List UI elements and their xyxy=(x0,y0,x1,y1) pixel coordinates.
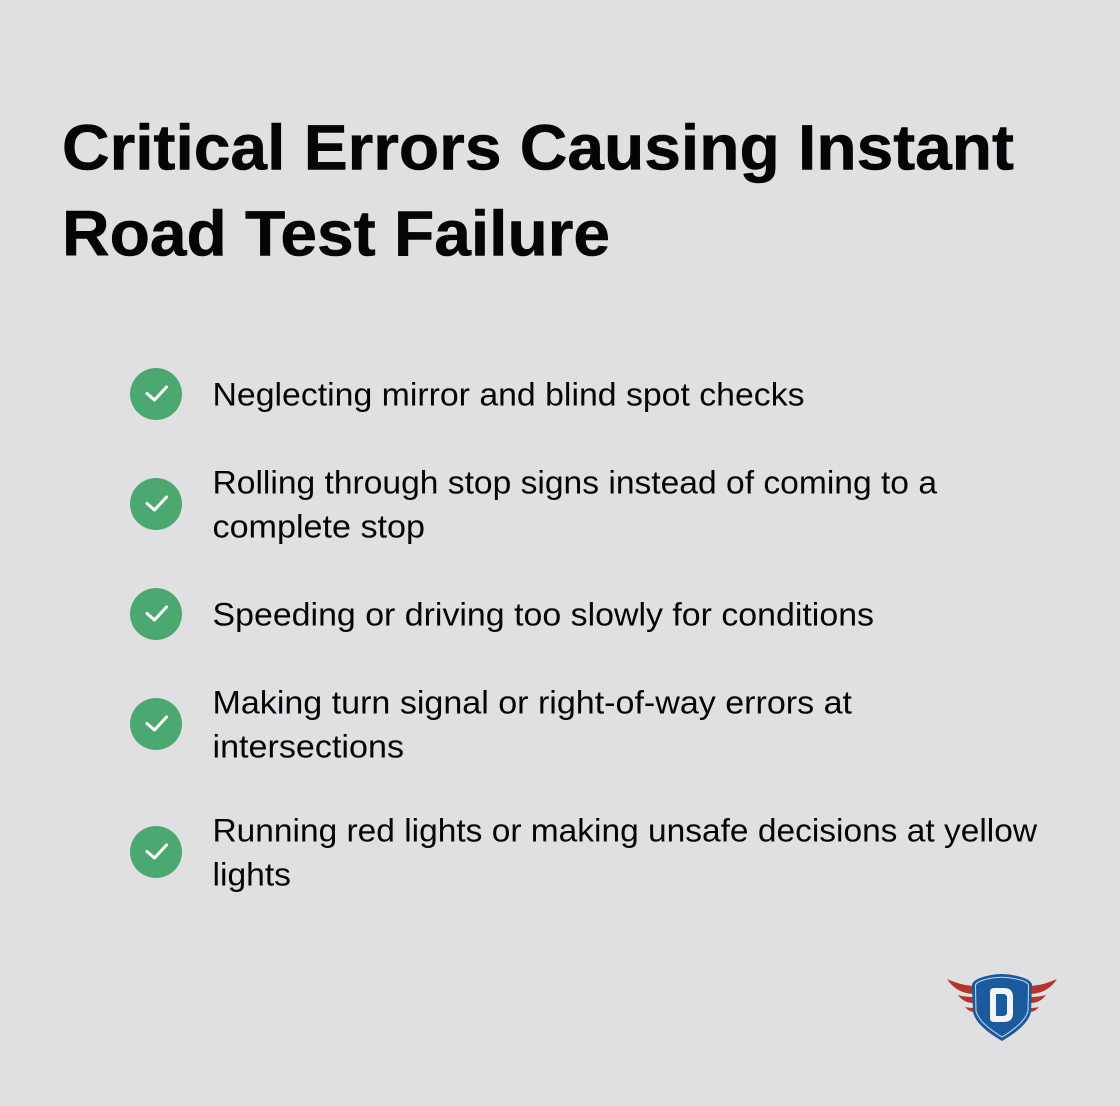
icon: winged shield logo xyxy=(947,974,1057,1041)
text: item 2 xyxy=(212,464,937,544)
icon: check 4 xyxy=(130,698,182,750)
text: item 1: Neglecting mirror and blind spot checks xyxy=(212,376,804,412)
item 5: red lights xyxy=(130,812,1038,892)
text: item 5: lights xyxy=(212,856,291,892)
text: item 3: Speeding or driving too slowly for conditions xyxy=(212,596,874,632)
text: item 4 xyxy=(212,684,852,764)
title: Critical Errors Causing Instant xyxy=(62,112,1014,184)
checklist xyxy=(130,368,1038,892)
item 2: stop signs xyxy=(130,464,937,544)
icon: check 3 xyxy=(130,588,182,640)
text: item 4: Making turn signal or right-of-way errors at xyxy=(212,684,852,720)
item 4: turn signals xyxy=(130,684,852,764)
item 1: mirror checks xyxy=(130,368,804,420)
icon: check 5 xyxy=(130,826,182,878)
title xyxy=(62,112,1014,270)
item 3: speed xyxy=(130,588,874,640)
text: item 4: intersections xyxy=(212,728,404,764)
text: item 2: Rolling through stop signs instead of coming to a xyxy=(212,464,937,500)
text: item 5 xyxy=(212,812,1038,892)
icon: check 2 xyxy=(130,478,182,530)
title: Road Test Failure xyxy=(62,198,610,270)
text: item 5: Running red lights or making unsafe decisions at yellow xyxy=(212,812,1038,848)
text: item 2: complete stop xyxy=(212,508,425,544)
icon: check 1 xyxy=(130,368,182,420)
